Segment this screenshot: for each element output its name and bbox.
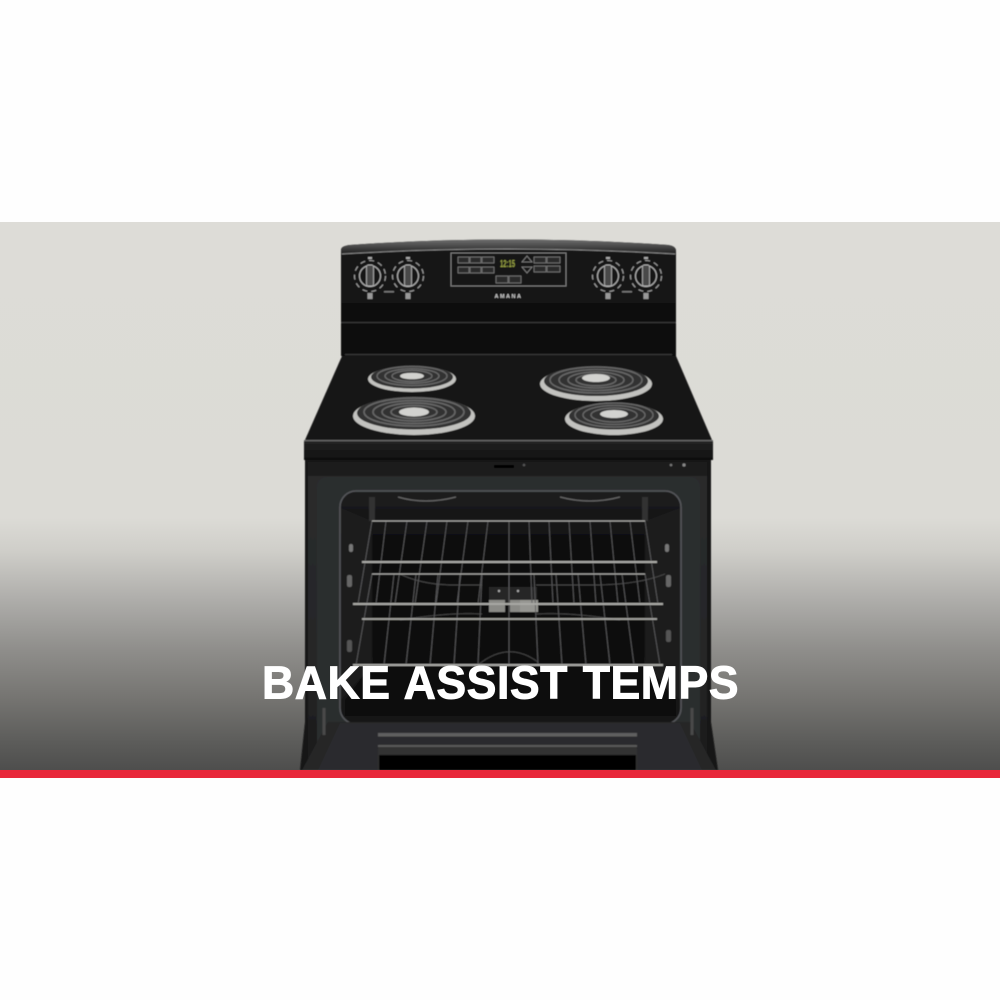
oven body [300, 458, 718, 770]
rack bracket [489, 587, 538, 612]
range [300, 240, 718, 770]
burner: back right [540, 366, 652, 401]
wall background panel [0, 222, 1000, 771]
brand: AMANA [495, 294, 522, 300]
burner: front left [353, 396, 475, 435]
title: BAKE ASSIST TEMPS [262, 656, 739, 708]
oven racks [353, 521, 663, 665]
oven door [302, 708, 716, 770]
rack supports [347, 544, 671, 652]
backguard [341, 240, 676, 322]
cooktop [304, 356, 713, 460]
oven cavity [340, 491, 681, 724]
broil element [400, 574, 665, 665]
burner: back left [368, 366, 456, 392]
control panel [451, 253, 566, 286]
control knobs [354, 257, 662, 299]
red accent bar [0, 770, 1000, 778]
burner: front right [565, 402, 663, 435]
clock display: 12:15 [500, 259, 515, 270]
rear trim band [341, 322, 676, 356]
